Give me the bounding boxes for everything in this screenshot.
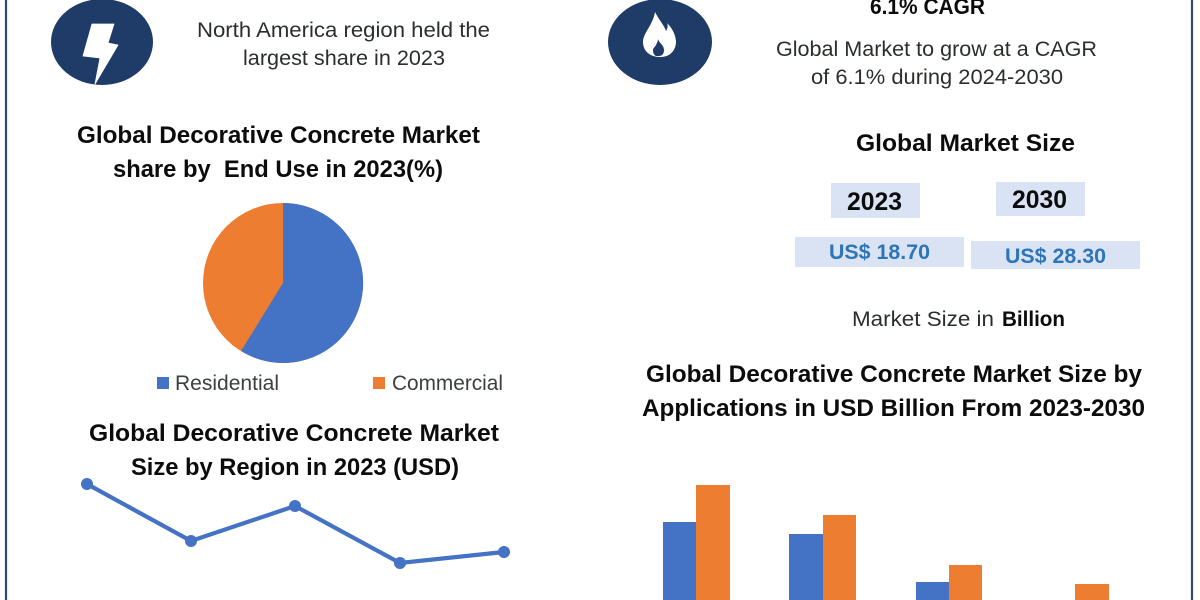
heading: end use share — [77, 122, 480, 183]
value box 2030: US$ 28.30 — [1005, 245, 1106, 268]
pie chart — [203, 203, 363, 363]
year box 2023 — [831, 183, 920, 218]
heading: global market size: Global Market Size — [856, 130, 1075, 157]
text: North America region: North America region held the — [197, 19, 490, 42]
bar chart — [663, 485, 1109, 600]
heading: applications: Applications in USD Billion From 2023-2030 — [642, 395, 1145, 422]
heading: region size: Global Decorative Concrete Market — [89, 420, 499, 447]
panel: global market size — [795, 130, 1140, 331]
legend: Residential — [175, 372, 279, 395]
unit note: Billion — [1002, 308, 1065, 331]
year box 2030: 2030 — [1012, 186, 1067, 214]
legend — [157, 372, 503, 395]
heading: applications — [642, 361, 1145, 422]
heading: end use share: Global Decorative Concrete Market — [77, 122, 480, 149]
year box 2030 — [996, 182, 1085, 216]
panel: CAGR highlight — [608, 0, 1097, 89]
panel: regional highlight — [51, 0, 490, 85]
value box 2023: US$ 18.70 — [829, 241, 930, 264]
line chart — [81, 478, 510, 569]
panel: end use share — [77, 122, 503, 395]
legend: Commercial — [392, 372, 503, 395]
value box 2030 — [971, 241, 1140, 269]
icon: lightning bolt — [51, 0, 153, 85]
text: 6.1% CAGR: Global Market to grow at a CAGR — [776, 38, 1097, 61]
year box 2023: 2023 — [847, 188, 902, 216]
text: 6.1% CAGR — [776, 0, 1097, 89]
text: 6.1% CAGR: of 6.1% during 2024-2030 — [811, 66, 1063, 89]
panel: applications chart — [642, 361, 1145, 600]
unit note: Market Size in — [852, 308, 994, 331]
value box 2023 — [795, 237, 964, 267]
heading: end use share: share by End Use in 2023(%) — [113, 156, 443, 183]
text: North America region — [197, 19, 490, 70]
unit note — [852, 308, 1065, 331]
panel: region size — [81, 420, 510, 569]
heading: region size — [89, 420, 499, 481]
text: North America region: largest share in 2023 — [243, 47, 445, 70]
icon: flame — [608, 0, 712, 85]
heading: applications: Global Decorative Concrete Market Size by — [646, 361, 1143, 388]
heading: region size: Size by Region in 2023 (USD) — [131, 454, 459, 481]
